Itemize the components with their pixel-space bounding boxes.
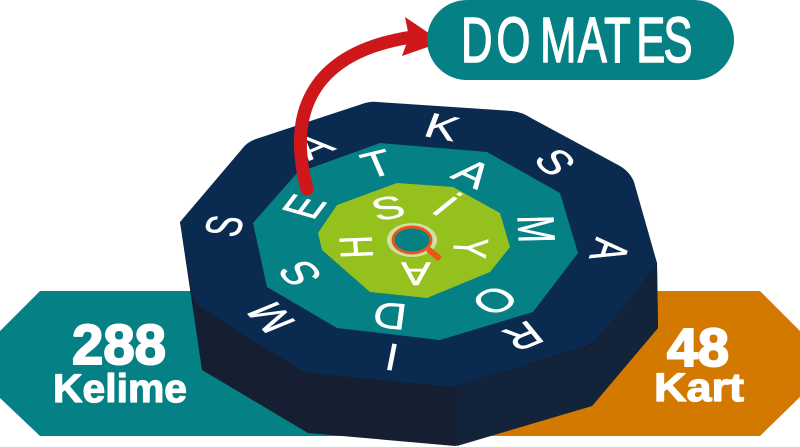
middle teal ring	[253, 143, 578, 340]
outer ring letters: S	[523, 142, 587, 182]
inner field letters: Y	[442, 236, 498, 260]
board top outer ring	[180, 102, 657, 387]
board side wall	[180, 200, 658, 446]
middle ring letters: A	[443, 151, 501, 197]
outer ring letters	[193, 106, 640, 379]
inner field letters: S	[365, 188, 411, 228]
outer ring letters: A	[577, 235, 640, 265]
label: kelime: Kelime	[53, 367, 187, 411]
inner field letters: İ	[423, 189, 467, 223]
middle ring letters: T	[355, 142, 399, 186]
icon: magnifier	[387, 223, 440, 259]
outer ring letters: M	[237, 295, 307, 339]
outer ring letters: I	[382, 335, 402, 379]
middle ring letters: E	[271, 190, 339, 224]
outer ring letters: K	[419, 106, 465, 148]
label: kart: Kart	[654, 366, 744, 410]
stat: 48: 48	[667, 318, 729, 378]
answer pill: DOMATES: DOMATES	[461, 4, 692, 76]
middle ring letters: S	[267, 254, 335, 292]
outer ring letters: A	[283, 126, 343, 166]
inner field letters: H	[330, 235, 384, 259]
middle ring letters	[267, 142, 564, 338]
arrow: red curved arrow	[300, 17, 442, 189]
middle ring letters: O	[460, 278, 528, 322]
answer pill: DOMATES	[427, 0, 734, 80]
inner field letters	[330, 188, 498, 291]
middle ring letters: D	[371, 294, 409, 338]
inner field letters: A	[401, 255, 431, 291]
panel: teal banner 288 kelime	[0, 291, 350, 436]
stat: 288: 288	[72, 313, 166, 377]
outer ring letters: S	[193, 212, 255, 240]
panel: orange banner 48 kart	[480, 291, 800, 436]
outer ring letters: R	[494, 313, 552, 359]
board: octagonal word wheel	[180, 102, 658, 446]
middle ring letters: M	[506, 215, 564, 243]
inner green field	[318, 183, 510, 298]
